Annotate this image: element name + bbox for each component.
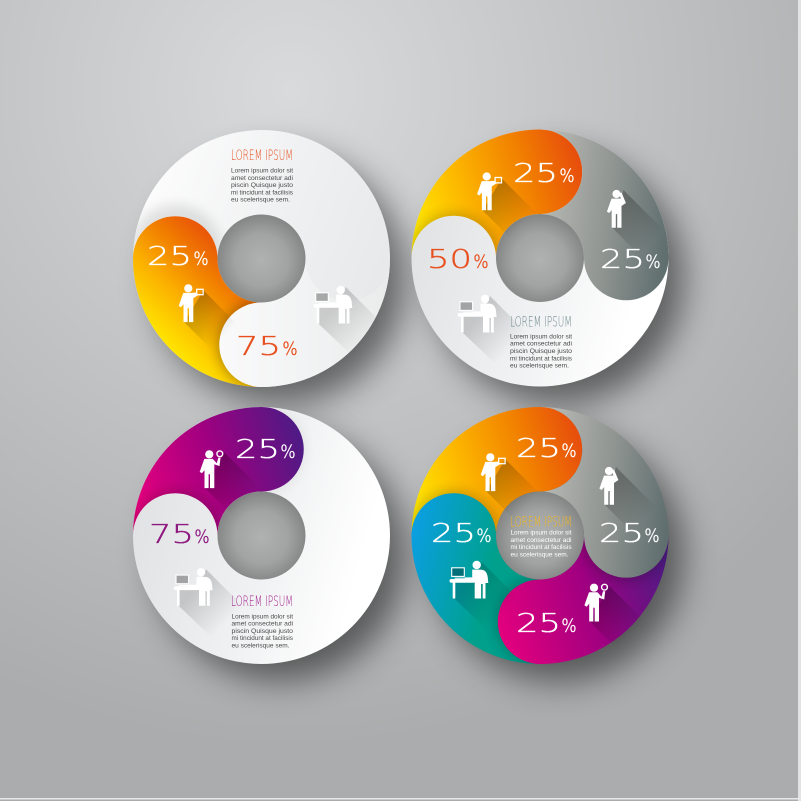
text: 25% top-right upper [513, 159, 574, 189]
text block: bottom-left: mi tincidunt at facilisis [232, 635, 293, 642]
icon: person on phone, bottom-right [599, 467, 659, 539]
text: 25% bottom-right left: 25 [431, 519, 476, 549]
text block: bottom-left: eu scelerisque sem. [232, 642, 290, 650]
text block: bottom-left [231, 594, 294, 650]
text: 25% bottom-right right: 25 [599, 519, 644, 549]
text: 25% top-left: 25 [147, 242, 192, 272]
icon: person with laptop, top-right [477, 172, 543, 244]
text: 25% bottom-right left: % [476, 525, 492, 547]
text: 25% top-right upper: 25 [513, 159, 558, 189]
panel: bottom-right donut four quarters [409, 407, 671, 666]
icon: person on phone, top-right [607, 190, 666, 262]
text: 75% bottom-left: % [194, 526, 210, 548]
text block: top-left: piscin Quisque justo [231, 182, 294, 189]
panel: top-left donut 25% / 75% [130, 130, 390, 388]
icon: person with lightbulb, bottom-left [200, 450, 265, 522]
text: 50% top-right: 50 [427, 245, 472, 275]
text block: top-right: piscin Quisque justo [510, 348, 573, 355]
text block: bottom-right centre: Lorem ipsum dolor sit [510, 529, 572, 536]
text block: bottom-left: LOREM IPSUM [231, 594, 293, 610]
icon: person at desk, bottom-right [450, 561, 525, 635]
text: 25% bottom-right top: % [562, 440, 576, 462]
text block: top-left [231, 148, 294, 204]
panel: bottom-left donut 25% / 75% [130, 406, 390, 664]
text block: bottom-right centre: LOREM IPSUM [510, 515, 572, 531]
text block: bottom-right centre: eu scelerisque sem. [510, 552, 569, 559]
text: 25% bottom-left [235, 435, 296, 465]
text block: top-right [510, 315, 573, 370]
text block: bottom-left: piscin Quisque justo [232, 628, 294, 635]
text: 75% top-left [236, 332, 298, 362]
text: 25% bottom-left: 25 [235, 435, 280, 465]
text: 75% top-left: 75 [236, 332, 281, 362]
text block: bottom-left: amet consectetur adi [232, 621, 293, 628]
text: 75% bottom-left: 75 [149, 520, 194, 550]
icon: person with laptop, bottom-right [481, 453, 546, 525]
icon: person at desk, bottom-left [174, 568, 249, 642]
text: 25% bottom-right bottom: 25 [516, 609, 561, 639]
text block: top-right: amet consectetur adi [510, 341, 572, 348]
text: 25% top-left: % [194, 248, 208, 270]
text block: top-left: mi tincidunt at facilisis [231, 189, 293, 196]
text block: top-left: amet consectetur adi [231, 175, 293, 182]
text: 25% bottom-right right [599, 519, 660, 549]
text: 75% top-left: % [282, 338, 298, 360]
text block: bottom-right centre: amet consectetur adi [510, 537, 572, 544]
icon: person with laptop, top-left [179, 284, 244, 356]
text: 75% bottom-left [149, 520, 210, 550]
text block: top-left: eu scelerisque sem. [231, 197, 290, 204]
text block: bottom-right centre: mi tincidunt at facilisis [510, 544, 572, 551]
text: 25% bottom-right left [431, 519, 492, 549]
panel: top-right donut 25 / 25 / 50 [409, 130, 668, 386]
text block: top-left: LOREM IPSUM [231, 148, 293, 164]
text block: bottom-right centre [510, 515, 572, 559]
text: 25% top-left [147, 242, 208, 272]
icon: person at desk, top-left [314, 286, 389, 360]
text: 25% bottom-left: % [280, 441, 296, 463]
text: 25% bottom-right top: 25 [516, 434, 561, 464]
text: 25% top-right upper: % [560, 165, 574, 187]
text: 50% top-right [427, 245, 488, 275]
text block: top-left: Lorem ipsum dolor sit [231, 168, 293, 174]
text: 25% bottom-right bottom [516, 609, 576, 639]
text: 25% top-right lower: % [646, 251, 660, 273]
text block: bottom-left: Lorem ipsum dolor sit [232, 613, 293, 620]
text block: top-right: Lorem ipsum dolor sit [510, 333, 572, 340]
text block: top-right: mi tincidunt at facilisis [510, 355, 572, 362]
icon: person at desk, top-right [458, 295, 533, 369]
text: 25% top-right lower [600, 245, 660, 275]
text: 25% bottom-right top [516, 434, 576, 464]
text: 25% bottom-right bottom: % [562, 615, 576, 637]
text block: top-right: eu scelerisque sem. [510, 363, 569, 370]
icon: person with lightbulb, bottom-right [584, 584, 650, 656]
text: 50% top-right: % [474, 251, 488, 273]
text: 25% top-right lower: 25 [600, 245, 645, 275]
text: 25% bottom-right right: % [644, 525, 660, 547]
text block: top-right: LOREM IPSUM [510, 315, 572, 331]
